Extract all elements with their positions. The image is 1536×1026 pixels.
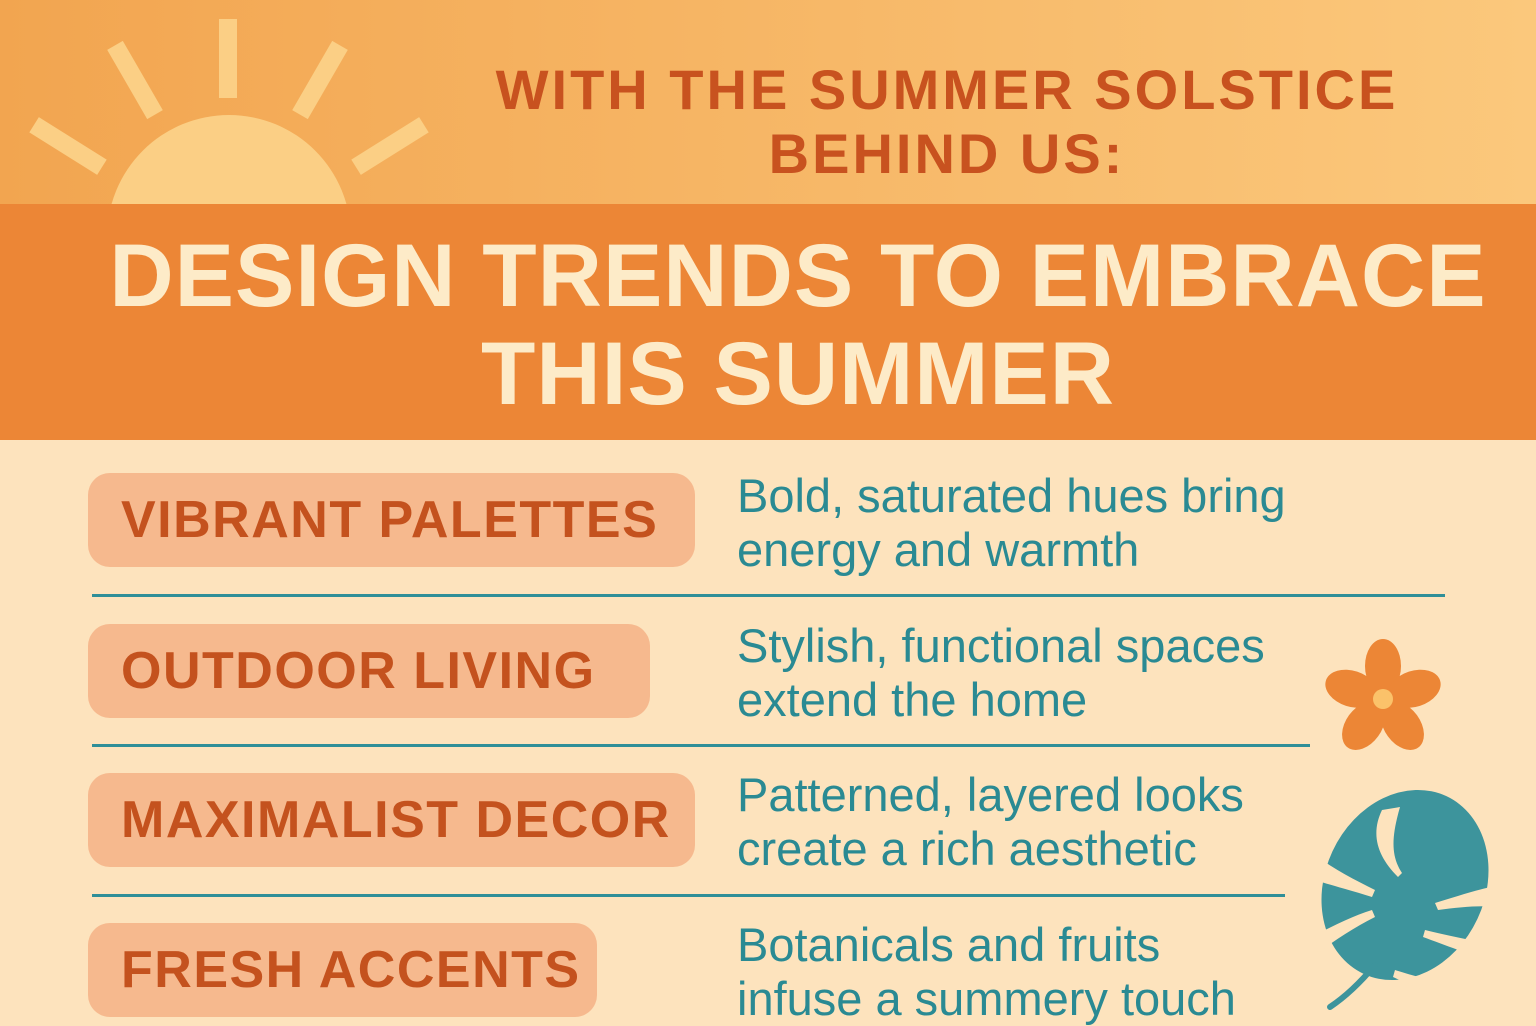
row 2 label <box>88 624 650 718</box>
subtitle <box>496 58 1398 185</box>
row 4 label <box>88 923 597 1017</box>
icon: sun <box>30 19 428 204</box>
row 3 label: MAXIMALIST DECOR <box>121 791 671 849</box>
row 1 label: VIBRANT PALETTES <box>121 491 658 549</box>
subtitle: BEHIND US: <box>769 122 1125 185</box>
row 4 description: Botanicals and fruits <box>737 918 1160 971</box>
header background <box>0 0 1536 204</box>
title <box>109 225 1487 423</box>
row 1 description: energy and warmth <box>737 523 1139 576</box>
row 2 description: extend the home <box>737 673 1087 726</box>
row 4 description <box>737 918 1236 1025</box>
row 2 description <box>737 619 1265 726</box>
row 3 description: Patterned, layered looks <box>737 768 1244 821</box>
row 4 description: infuse a summery touch <box>737 972 1236 1025</box>
icon: monstera leaf <box>1322 790 1488 1010</box>
title banner <box>0 204 1536 440</box>
subtitle: WITH THE SUMMER SOLSTICE <box>496 58 1398 121</box>
row 4 label: FRESH ACCENTS <box>121 941 581 999</box>
row 1 description <box>737 469 1286 576</box>
row 3 description: create a rich aesthetic <box>737 822 1197 875</box>
row 3 label <box>88 773 695 867</box>
icon: flower <box>1325 639 1441 750</box>
row 2 label: OUTDOOR LIVING <box>121 642 596 700</box>
row 3 description <box>737 768 1244 875</box>
title: THIS SUMMER <box>481 323 1115 423</box>
title: DESIGN TRENDS TO EMBRACE <box>109 225 1487 325</box>
row 1 description: Bold, saturated hues bring <box>737 469 1286 522</box>
row 2 description: Stylish, functional spaces <box>737 619 1265 672</box>
row 1 label <box>88 473 695 567</box>
